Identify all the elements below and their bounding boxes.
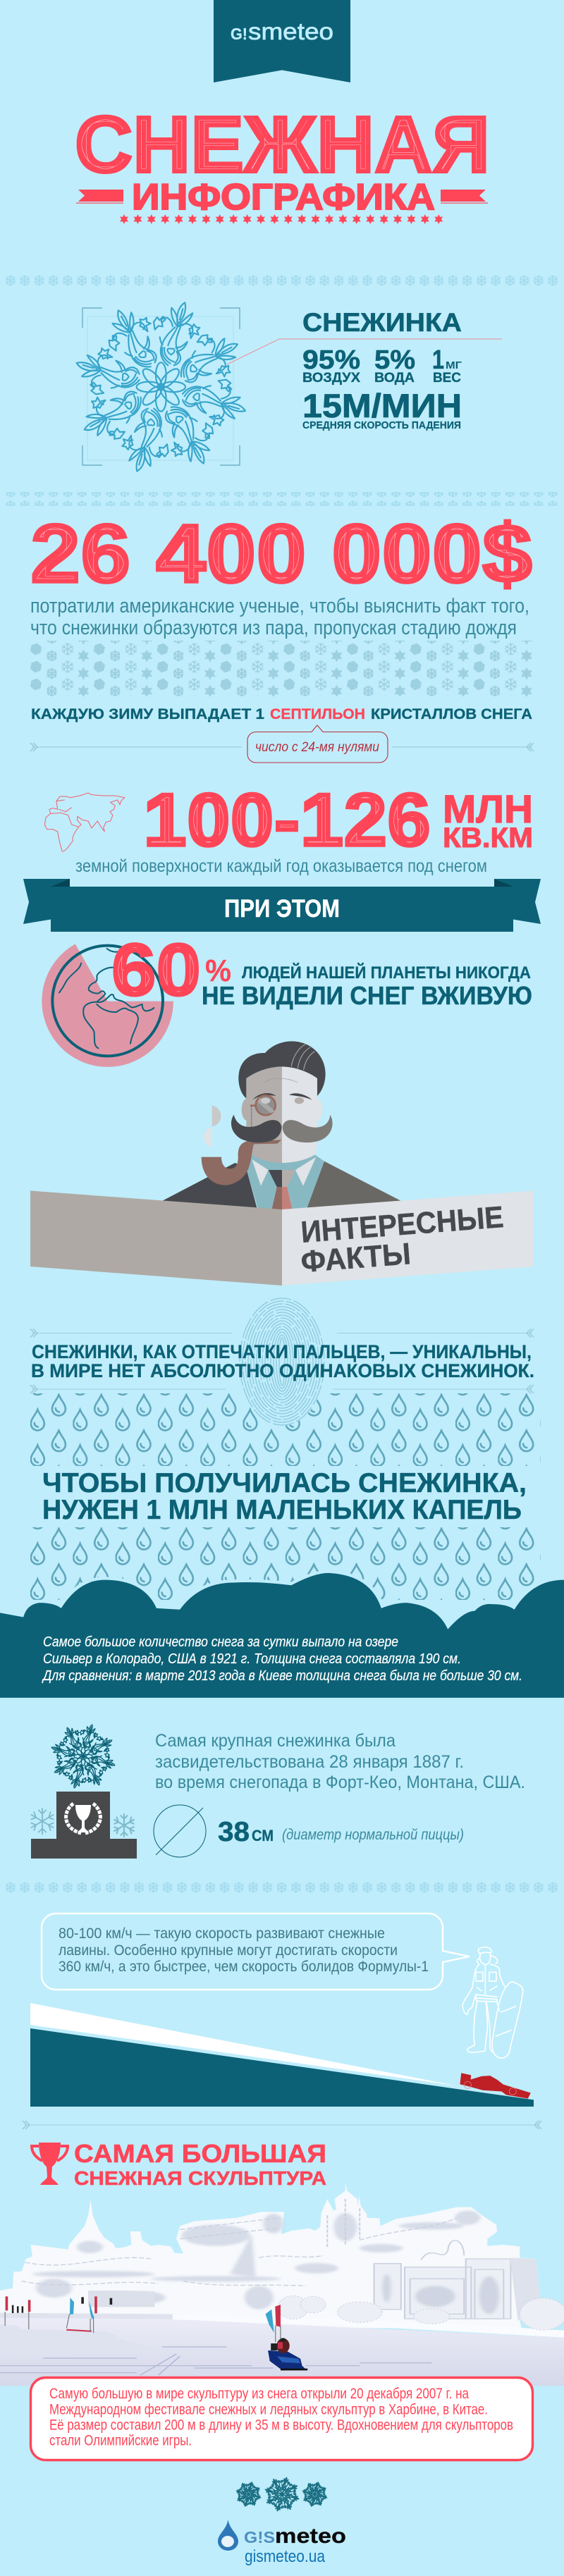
heading line 1: САМАЯ БОЛЬШАЯ	[74, 2139, 326, 2168]
stat: 1 mg weight	[432, 345, 462, 386]
stat: 95% air	[302, 345, 360, 386]
logo wordmark: G!S	[244, 2528, 275, 2546]
panel: largest snow sculpture	[0, 2139, 564, 2460]
flags and people	[6, 2296, 281, 2332]
logo text: Gismeteo: smeteo	[248, 18, 333, 44]
raindrop pattern, lower	[30, 1527, 541, 1600]
statement: septillion crystals: КАЖДУЮ ЗИМУ ВЫПАДАЕТ 1	[31, 705, 264, 722]
book right page with heading	[282, 1191, 534, 1286]
title	[75, 100, 490, 225]
icon: world map	[44, 793, 125, 851]
icon: fingerprint	[238, 1298, 326, 1426]
line with chevrons	[30, 743, 534, 751]
logo ribbon	[214, 0, 350, 82]
book right page with heading: ИНТЕРЕСНЫЕ	[300, 1200, 505, 1250]
record snowfall text: Самое большое количество снега за сутки выпало на озере	[43, 1634, 398, 1650]
heading line 2: СНЕЖНАЯ СКУЛЬПТУРА	[74, 2167, 326, 2189]
speech bubble: 80-100 км/ч — такую скорость развивают снежные	[59, 1925, 385, 1942]
website: gismeteo.ua	[245, 2547, 326, 2566]
snowmobile	[268, 2338, 307, 2370]
panel: avalanche speed	[30, 1913, 534, 2107]
left ribbon ornament	[76, 190, 123, 204]
panel: largest snowflake	[31, 1724, 525, 1859]
subtitle: ИНФОГРАФИКА: ИНФОГРАФИКА	[132, 177, 435, 218]
book right page with heading: ФАКТЫ	[300, 1237, 412, 1279]
big number: 26 400 000$: 26 400 000$	[30, 507, 532, 600]
book left page	[30, 1191, 282, 1286]
speech bubble	[42, 1913, 470, 1990]
text box: Самую большую в мире скульптуру из снега открыли 20 декабря 2007 г. на	[49, 2386, 469, 2402]
snowflake divider	[4, 1881, 560, 1895]
logo wordmark	[244, 2525, 346, 2548]
unit: МЛН: МЛН	[443, 787, 533, 831]
snowflake pattern	[28, 641, 534, 696]
banner text: ПРИ ЭТОМ	[224, 895, 340, 923]
heading: СНЕЖИНКА: СНЕЖИНКА	[302, 308, 462, 337]
callout line	[227, 339, 502, 364]
trophy with laurels	[66, 1804, 100, 1833]
stat: 5% water: 5%	[374, 345, 415, 375]
description: земной поверхности каждый год оказывается под снегом	[75, 856, 487, 876]
stat: 95% air: 95%	[302, 345, 360, 375]
stat: 1 mg weight: МГ	[446, 359, 462, 371]
description	[30, 595, 529, 639]
illustration: snow sculpture	[0, 2183, 564, 2386]
avalanche: white wedge	[30, 2003, 457, 2086]
big number: 100-126: 100-126	[143, 777, 431, 862]
snowflake divider	[4, 273, 560, 288]
logo wordmark: meteo	[275, 2525, 346, 2548]
panel: snow cover area	[44, 777, 533, 876]
logo text: Gismeteo: G!	[231, 25, 247, 43]
callout: number with 24 zeros: число с 24-мя нулями	[255, 740, 379, 755]
illustration: man with monocle, pipe and book	[30, 1041, 534, 1286]
stat: 15 m/min: 15М/МИН	[302, 387, 462, 424]
icon: snowflake on podium	[31, 1724, 137, 1859]
panel: 60 percent	[42, 929, 532, 1067]
text box	[31, 2378, 533, 2460]
diameter value: СМ	[252, 1827, 274, 1844]
panel: snowflake facts	[74, 300, 502, 474]
callout: number with 24 zeros	[247, 725, 388, 763]
title line: СНЕЖНАЯ: СНЕЖНАЯ	[75, 100, 490, 189]
statement: unique like fingerprints: В МИРЕ НЕТ АБСОЛЮТНО ОДИНАКОВЫХ СНЕЖИНОК.	[31, 1360, 534, 1381]
line with chevrons	[23, 2121, 541, 2129]
stat: 5% water	[374, 345, 415, 386]
speech bubble: лавины. Особенно крупные могут достигать скорости	[59, 1942, 398, 1959]
bushes	[278, 2295, 564, 2330]
statement: septillion crystals	[31, 705, 532, 722]
text box: стали Олимпийские игры.	[49, 2433, 192, 2448]
icon: snowboarder outline	[462, 1947, 523, 2058]
percent sign: %	[205, 954, 231, 988]
statement: 1 million droplets: НУЖЕН 1 МЛН МАЛЕНЬКИХ КАПЕЛЬ	[42, 1495, 522, 1525]
raindrop pattern, upper	[30, 1393, 541, 1466]
diameter value: 38	[218, 1817, 250, 1847]
icon: logo drop	[218, 2520, 238, 2551]
snowflake divider	[4, 492, 560, 506]
largest snowflake text: засвидетельствована 28 января 1887 г.	[155, 1752, 464, 1772]
stat: 5% water: ВОДА	[374, 371, 415, 386]
icon: red trophy	[32, 2143, 68, 2185]
statement line 1: ЛЮДЕЙ НАШЕЙ ПЛАНЕТЫ НИКОГДА	[242, 963, 531, 982]
slope	[30, 2028, 534, 2107]
big number: 60: 60	[111, 929, 201, 1011]
statement line 2: НЕ ВИДЕЛИ СНЕГ ВЖИВУЮ	[202, 981, 532, 1010]
diameter value	[218, 1817, 274, 1847]
statement: unique like fingerprints: СНЕЖИНКИ, КАК ОТПЕЧАТКИ ПАЛЬЦЕВ, — УНИКАЛЬНЫ,	[32, 1341, 532, 1362]
icon: diameter symbol	[154, 1805, 206, 1857]
speech bubble: 360 км/ч, а это быстрее, чем скорость болидов Формулы-1	[59, 1959, 429, 1975]
banner: при этом	[23, 879, 541, 932]
lines with chevrons around fingerprint text	[30, 1329, 534, 1393]
statement: 1 million droplets	[42, 1468, 527, 1525]
stat caption: СРЕДНЯЯ СКОРОСТЬ ПАДЕНИЯ	[302, 420, 461, 431]
star row	[117, 214, 446, 225]
panel: research cost	[28, 507, 534, 763]
record snowfall text: Сильвер в Колорадо, США в 1921 г. Толщина снега составляла 190 см.	[43, 1651, 461, 1667]
panel: cloud with record snowfall	[0, 1573, 564, 1708]
right ribbon ornament	[441, 190, 488, 204]
cloud shape	[0, 1573, 564, 1698]
diameter comparison: (диаметр нормальной пиццы)	[282, 1827, 464, 1843]
record snowfall text	[42, 1634, 522, 1684]
largest snowflake text: Самая крупная снежинка была	[155, 1731, 396, 1751]
stat: 95% air: ВОЗДУХ	[302, 371, 360, 386]
stat: 1 mg weight: 1	[432, 345, 444, 375]
statement: 1 million droplets: ЧТОБЫ ПОЛУЧИЛАСЬ СНЕЖИНКА,	[42, 1468, 527, 1498]
snow pile	[0, 2324, 158, 2357]
man figure	[161, 1041, 403, 1212]
icon: ornate snowflake with frame	[74, 300, 248, 474]
largest snowflake text	[155, 1731, 525, 1792]
icons: three snowflakes	[236, 2477, 327, 2511]
statement: septillion crystals: КРИСТАЛЛОВ СНЕГА	[371, 705, 532, 722]
statement: septillion crystals: СЕПТИЛЬОН	[270, 705, 365, 722]
stat: 1 mg weight: ВЕС	[433, 371, 461, 386]
statement: unique like fingerprints	[31, 1341, 534, 1381]
icon: globe with pie chart	[42, 944, 173, 1067]
unit: КВ.КМ: КВ.КМ	[443, 822, 533, 853]
footer logo	[218, 2520, 346, 2566]
icon: formula 1 car	[460, 2073, 530, 2098]
largest snowflake text: во время снегопада в Форт-Кео, Монтана, США.	[155, 1773, 525, 1792]
